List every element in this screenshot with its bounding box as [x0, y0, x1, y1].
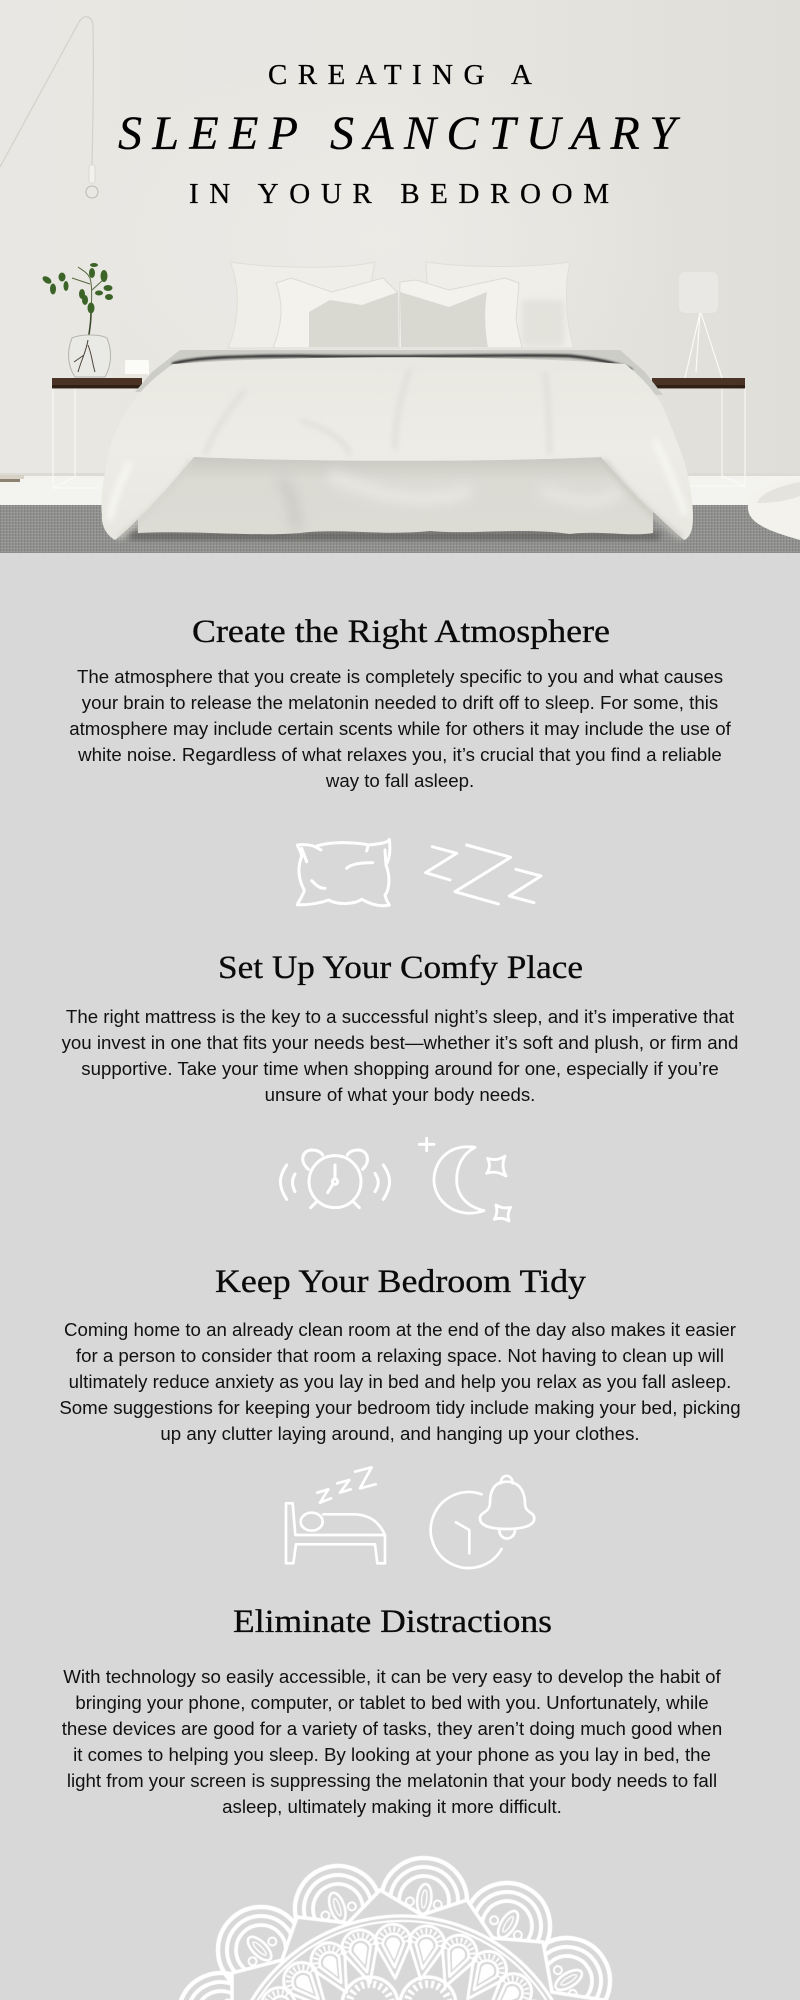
body text: these devices are good for a variety of tasks, they aren’t doing much good when: [62, 1718, 722, 1739]
body text: it comes to helping you sleep. By looking at your phone as you lay in bed, the: [73, 1744, 711, 1765]
body text: [62, 1006, 738, 1105]
heading: Eliminate Distractions: [233, 1604, 552, 1640]
section 4: eliminate distractions: [62, 1604, 722, 1817]
body text: [69, 666, 732, 791]
book on floor: [0, 475, 24, 482]
body text: atmosphere may include certain scents while for others it may include the use of: [69, 718, 732, 739]
throw dark edge: [172, 355, 632, 370]
pillows: [228, 262, 574, 348]
body text: bringing your phone, computer, or tablet to bed with you. Unfortunately, while: [75, 1692, 709, 1713]
floor shadow under bed: [130, 532, 660, 540]
body text: you invest in one that fits your needs best—whether it’s soft and plush, or firm and: [62, 1032, 738, 1053]
heading: Keep Your Bedroom Tidy: [215, 1264, 587, 1300]
throw blanket: [135, 350, 663, 395]
body text: for a person to consider that room a relaxing space. Not having to clean up will: [76, 1345, 724, 1366]
icon: zzz: [426, 845, 541, 904]
body text: The atmosphere that you create is completely specific to you and what causes: [77, 666, 723, 687]
title line: in your bedroom: IN YOUR BEDROOM: [189, 178, 609, 210]
wall light glow: [80, 50, 680, 430]
title line: creating a: CREATING A: [268, 59, 532, 91]
body text: supportive. Take your time when shopping around for one, especially if you’re: [81, 1058, 719, 1079]
icon: moon and stars: [419, 1138, 511, 1221]
section 3: keep your bedroom tidy: [59, 1264, 741, 1444]
body text: The right mattress is the key to a successful night’s sleep, and it’s imperative that: [66, 1006, 735, 1027]
mandala decoration: [150, 1850, 650, 2000]
mid right pillow: [399, 278, 522, 348]
right bedside table: [652, 378, 745, 486]
heading: Set Up Your Comfy Place: [218, 950, 583, 986]
body text: your brain to release the melatonin needed to drift off to sleep. For some, this: [82, 692, 718, 713]
body text: ultimately reduce anxiety as you lay in bed and help you relax as you fall asleep.: [69, 1371, 731, 1392]
skirting board and floor: [0, 473, 800, 507]
body text: With technology so easily accessible, it can be very easy to develop the habit of: [63, 1666, 722, 1687]
icon: alarm clock: [280, 1150, 390, 1208]
mid left pillow: [273, 278, 397, 348]
lamp on right table: [679, 272, 722, 378]
hero bedroom image: [0, 0, 800, 553]
body text: white noise. Regardless of what relaxes you, it’s crucial that you find a reliable: [77, 744, 722, 765]
title: [118, 59, 680, 210]
title line: sleep sanctuary: SLEEP SANCTUARY: [118, 107, 680, 160]
wall lamp cord and bulb: [0, 17, 98, 198]
plant in glass vase: [41, 263, 113, 377]
ottoman: [748, 477, 800, 540]
duvet folds: [110, 368, 685, 538]
body text: light from your screen is suppressing the melatonin that your body needs to fall: [67, 1770, 717, 1791]
body text: [59, 1319, 741, 1444]
duvet: [101, 357, 693, 540]
icon: pillow: [297, 839, 390, 906]
body text: way to fall asleep.: [325, 770, 474, 791]
skirt folds: [280, 475, 620, 530]
icon: clock and bell: [431, 1476, 534, 1568]
heading: Create the Right Atmosphere: [192, 614, 610, 650]
body text: Some suggestions for keeping your bedroom tidy include making your bed, picking: [59, 1397, 741, 1418]
wall: [0, 0, 800, 480]
back right pillow: [426, 262, 574, 348]
front left grey pillow: [309, 292, 398, 347]
rug: [0, 505, 800, 553]
section 2: set up your comfy place: [62, 950, 738, 1105]
section 1: create the right atmosphere: [69, 614, 732, 791]
cup and saucer: [113, 360, 149, 378]
body text: unsure of what your body needs.: [265, 1084, 535, 1105]
back left pillow: [228, 262, 378, 348]
bed base skirt: [138, 457, 653, 534]
body text: up any clutter laying around, and hanging up your clothes.: [160, 1423, 640, 1444]
body text: Coming home to an already clean room at the end of the day also makes it easier: [64, 1319, 736, 1340]
body text: [62, 1666, 722, 1817]
front right grey pillow: [400, 292, 488, 347]
left bedside table: [52, 378, 142, 488]
back pillow shade: [522, 300, 564, 346]
body text: asleep, ultimately making it more difficult.: [222, 1796, 562, 1817]
icon: person sleeping in bed: [286, 1467, 385, 1563]
